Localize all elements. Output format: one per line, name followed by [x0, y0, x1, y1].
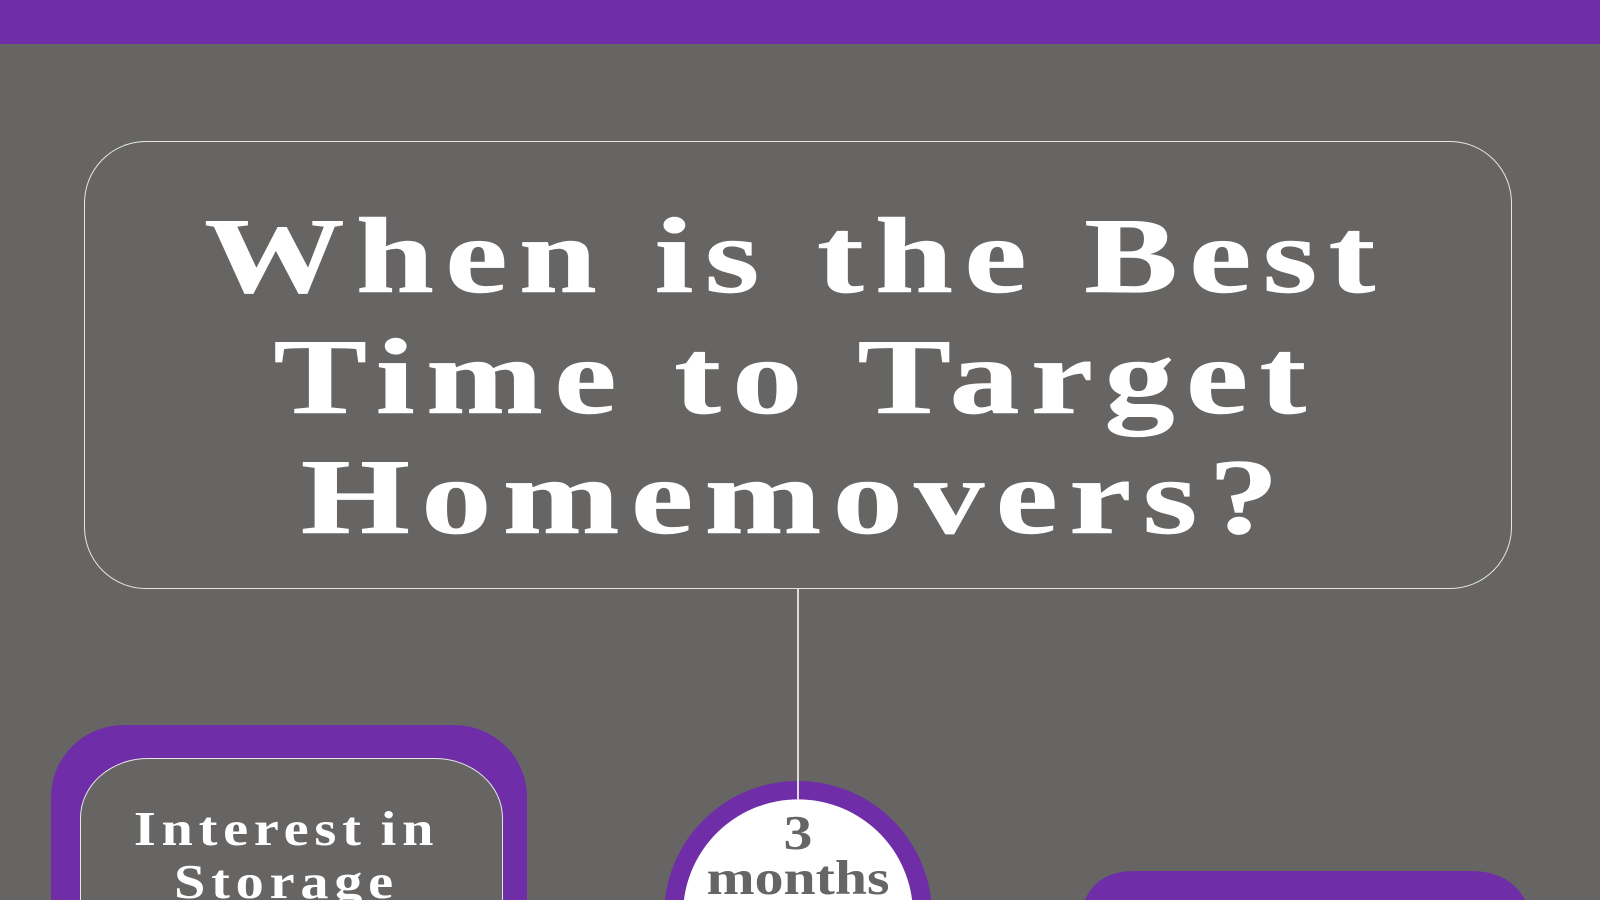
panel: interest in storage [51, 725, 527, 900]
panel heading [134, 801, 439, 900]
connector line [797, 588, 798, 800]
title [204, 197, 1387, 557]
title: When is the Best [204, 197, 1387, 316]
title: Homemovers? [301, 438, 1290, 557]
panel heading: Interest in [134, 801, 439, 856]
circle: 3 months: 3 [784, 805, 812, 860]
title panel [84, 141, 1512, 589]
inner panel [80, 758, 503, 900]
title: Time to Target [273, 318, 1317, 436]
header bar [0, 0, 1600, 44]
